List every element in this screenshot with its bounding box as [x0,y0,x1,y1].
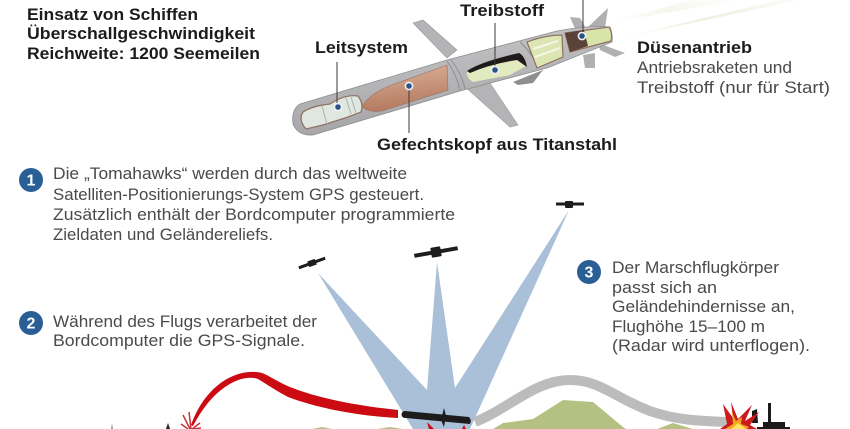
terrain hills [312,400,693,429]
text block 3 [612,258,810,355]
marker dots [334,32,586,111]
launch ship silhouettes [111,423,170,429]
badge 1: 1 [27,172,36,190]
target: explosion [720,402,759,429]
flight path: red launch arc [191,372,398,426]
heading: key facts [27,5,260,63]
text block 1: Satelliten-Positionierungs-System GPS gesteuert. [53,185,424,204]
heading: key facts: Überschallgeschwindigkeit [27,24,255,43]
warhead [362,65,448,111]
cruise missile silhouette [402,408,471,427]
text block 1: Zusätzlich enthält der Bordcomputer programmierte [53,205,455,224]
text block 3: (Radar wird unterflogen). [612,336,810,355]
rear fuel compartment [527,35,563,68]
text block 1 [53,164,455,244]
satellite centre [413,243,459,261]
text block 2 [53,312,317,350]
flight path: grey terrain following [475,380,727,422]
label: Düsenantrieb [637,38,830,97]
label: Düsenantrieb: Treibstoff (nur für Start) [637,78,830,97]
text block 1: Die „Tomahawks“ werden durch das weltweite [53,164,407,183]
keel [513,70,543,85]
badge 2 [19,311,43,335]
badge 3 [577,260,601,284]
tail fins [570,8,625,68]
satellite left [298,255,326,271]
label: Düsenantrieb: Antriebsraketen und [637,58,792,77]
guidance compartment [301,96,362,129]
red sparks under missile [427,422,466,429]
fuselage [293,26,612,135]
badge 3: 3 [585,264,594,282]
section rings [447,42,537,90]
wing: top [413,20,457,58]
exhaust trails [609,0,800,40]
label: Düsenantrieb: Düsenantrieb [637,38,752,57]
text block 1: Zieldaten und Geländereliefs. [53,225,273,244]
badge 1 [19,168,43,192]
text block 2: Bordcomputer die GPS-Signale. [53,331,305,350]
GPS signal beams [318,210,569,429]
text block 3: Der Marschflugkörper [612,258,779,277]
target: ship [752,403,790,429]
badge 2: 2 [27,316,36,332]
text block 3: Geländehindernisse an, [612,297,795,316]
satellite right [556,201,584,208]
leader lines [337,0,583,133]
label: Leitsystem: Leitsystem [315,38,408,57]
heading: key facts: Einsatz von Schiffen [27,5,198,24]
guidance ribs [322,97,356,124]
jet engine [565,27,612,52]
text block 3: passt sich an [612,278,717,297]
text block 2: Während des Flugs verarbeitet der [53,312,317,331]
fuel window [467,55,526,82]
label: Gefechtskopf: Gefechtskopf aus Titanstahl [377,135,617,154]
wing: bottom [463,83,518,127]
launch blast [181,412,201,429]
text block 3: Flughöhe 15–100 m [612,317,765,336]
satellites [298,201,584,271]
label: Treibstoff: Treibstoff [460,1,544,20]
missile cutaway illustration [293,0,625,135]
heading: key facts: Reichweite: 1200 Seemeilen [27,44,260,63]
